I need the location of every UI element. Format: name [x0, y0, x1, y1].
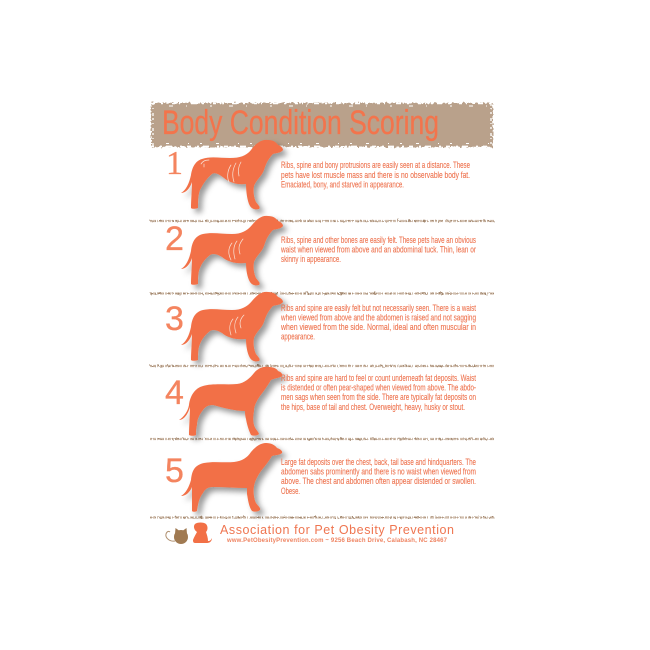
description 3: when viewed from the side. Normal, ideal and often muscular in — [280, 322, 476, 332]
contact line: www.PetObesityPrevention.com ~ 9256 Beach Drive, Calabash, NC 28467 — [226, 538, 448, 544]
footer — [166, 522, 454, 544]
description 2: Ribs, spine and other bones are easily felt. These pets have an obvious — [281, 235, 476, 245]
description 2: skinny in appearance. — [281, 254, 341, 264]
description 1: Emaciated, bony, and starved in appearance. — [281, 180, 404, 190]
row 5 — [165, 443, 476, 512]
description 3 — [280, 303, 476, 342]
row 4 — [165, 367, 476, 436]
description 4: is distended or often pear-shaped when viewed from above. The abdo- — [281, 382, 476, 392]
description 3: Ribs and spine are easily felt but not necessarily seen. There is a waist — [281, 303, 476, 313]
number 5: 5 — [165, 452, 184, 490]
dog: overweight — [179, 367, 282, 436]
description 5: above. The chest and abdomen often appear distended or swollen. — [281, 476, 476, 486]
description 2 — [280, 235, 476, 264]
number 3: 3 — [165, 300, 184, 338]
description 4: the hips, base of tail and chest. Overweight, heavy, husky or stout. — [281, 402, 465, 412]
description 4 — [281, 373, 476, 412]
dog: emaciated — [181, 140, 283, 209]
description 5 — [281, 457, 476, 496]
description 5: Large fat deposits over the chest, back, tail base and hindquarters. The — [281, 457, 476, 467]
description 1: Ribs, spine and bony protrusions are easily seen at a distance. These — [281, 160, 470, 170]
dog: ideal — [181, 292, 283, 361]
description 1: pets have lost muscle mass and there is no observable body fat. — [281, 170, 470, 180]
icon: dog — [193, 522, 212, 543]
dog: thin — [181, 216, 283, 285]
description 3: appearance. — [281, 332, 315, 342]
number 2: 2 — [165, 220, 184, 258]
description 4: men sags when seen from the side. There are typically fat deposits on — [281, 392, 476, 402]
row 1 — [166, 140, 470, 209]
description 4: Ribs and spine are hard to feel or count underneath fat deposits. Waist — [281, 373, 476, 383]
title: Body Condition Scoring — [162, 104, 439, 142]
description 3: when viewed from above and the abdomen is raised and not sagging — [280, 312, 476, 322]
number 4: 4 — [165, 374, 184, 412]
row 2 — [165, 216, 476, 285]
organization name: Association for Pet Obesity Prevention — [220, 523, 454, 537]
dog: obese — [181, 443, 282, 512]
description 2: waist when viewed from above and an abdominal tuck. Thin, lean or — [280, 244, 476, 254]
banner — [150, 103, 494, 147]
icon: cat — [166, 528, 188, 544]
description 1 — [281, 160, 470, 190]
description 5: abdomen sabs prominently and there is no waist when viewed from — [281, 466, 476, 476]
dividers — [150, 221, 494, 518]
row 3 — [165, 292, 476, 361]
description 5: Obese. — [281, 486, 300, 496]
number 1: 1 — [166, 145, 183, 182]
